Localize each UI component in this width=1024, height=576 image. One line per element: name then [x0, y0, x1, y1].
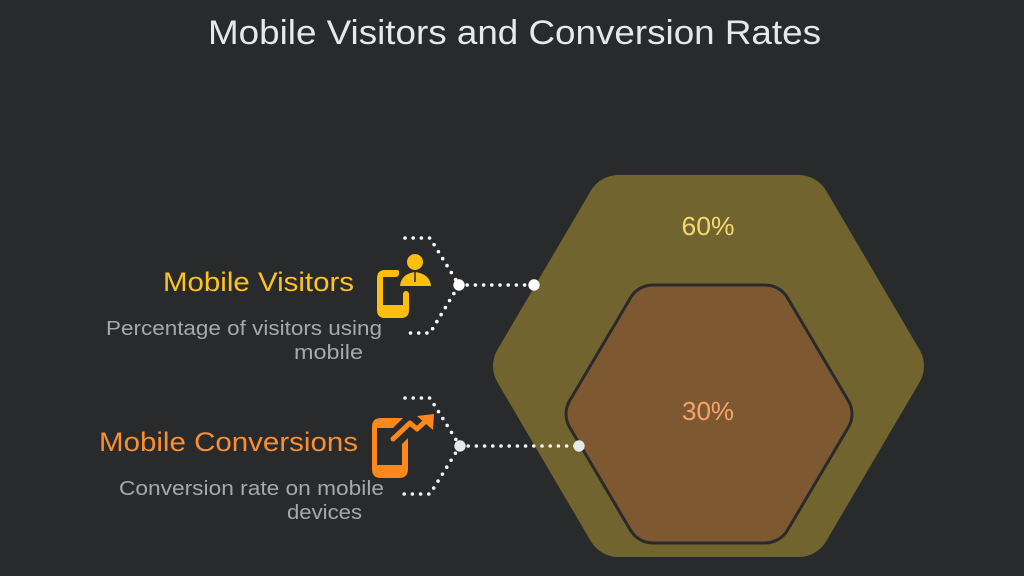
block: mobile conversions: Mobile Conversions [99, 427, 358, 457]
block: mobile visitors: mobile [294, 342, 363, 364]
block: mobile visitors [106, 267, 382, 364]
block: mobile conversions [99, 427, 384, 524]
block: mobile visitors: Mobile Visitors [163, 267, 354, 297]
panel: inner hexagon 30% [566, 285, 852, 543]
block: mobile conversions: devices [287, 502, 362, 524]
icon: phone with rising arrow [372, 414, 434, 478]
title: Mobile Visitors and Conversion Rates [208, 14, 821, 52]
connector: mobile visitors [403, 238, 540, 333]
connector: mobile conversions [403, 398, 585, 494]
panel: outer hexagon 60% [493, 175, 924, 557]
icon: phone with visitor [377, 254, 431, 318]
label: 60%: 60% [682, 211, 734, 241]
label: 30%: 30% [682, 396, 734, 426]
block: mobile conversions: Conversion rate on mobile [119, 478, 384, 500]
block: mobile visitors: Percentage of visitors using [106, 318, 382, 340]
